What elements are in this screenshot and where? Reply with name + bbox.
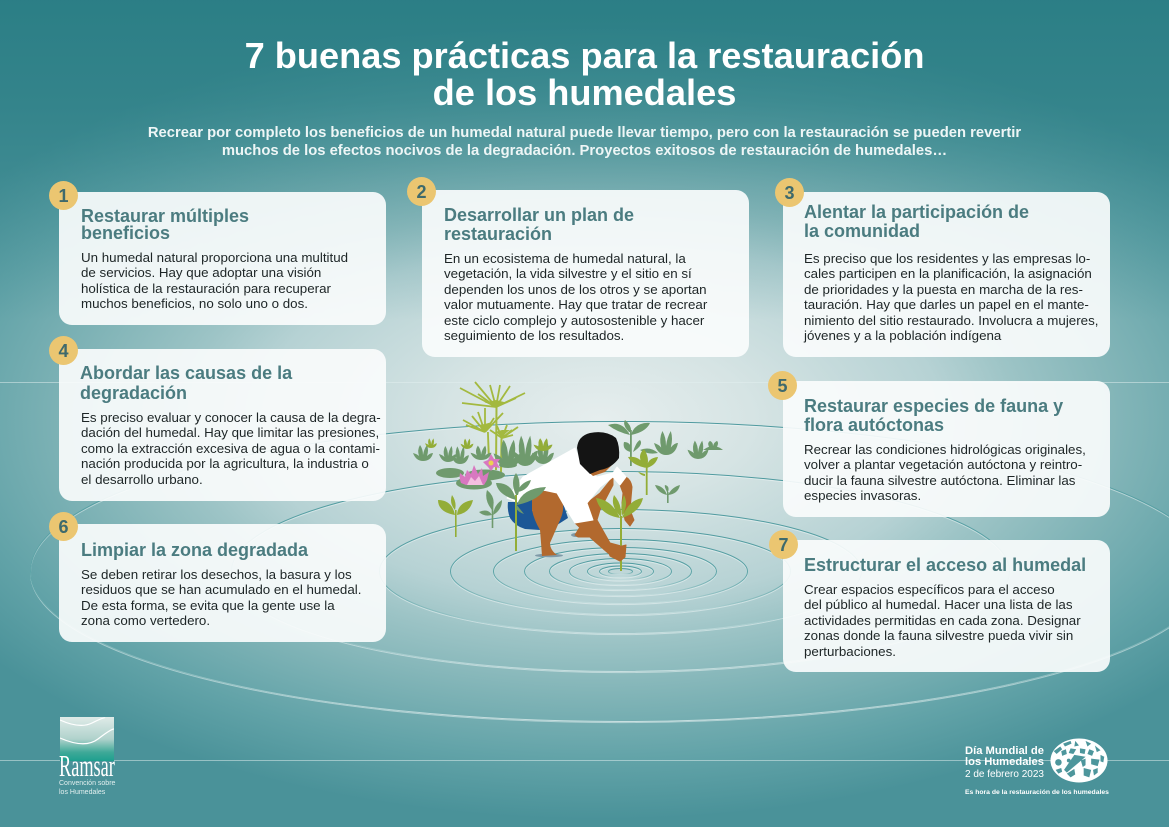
body text: del público al humedal. Hacer una lista de las xyxy=(804,597,1073,612)
heading xyxy=(444,205,634,244)
heading xyxy=(81,206,249,243)
icon: right yellow seedling xyxy=(628,449,658,495)
panel: card 2 xyxy=(422,190,749,357)
body text: Crear espacios específicos para el acceso xyxy=(804,582,1055,597)
body text: Es preciso evaluar y conocer la causa de la degra- xyxy=(81,410,381,425)
person: foot shadows xyxy=(535,533,581,557)
heading: flora autóctonas xyxy=(804,414,944,434)
badge 1: 1 xyxy=(58,186,68,206)
icon: water lilies xyxy=(460,454,500,485)
person: left arm xyxy=(575,477,625,561)
logo text xyxy=(965,745,1044,768)
body text xyxy=(804,442,1086,503)
body text: Un humedal natural proporciona una multitud xyxy=(81,250,348,265)
illustration: person planting in wetland xyxy=(413,381,723,571)
body text: dependen los unos de los otros y se aportan xyxy=(444,282,707,297)
badge 6: 6 xyxy=(58,517,68,537)
body text: vegetación, la vida silvestre y el sitio en sí xyxy=(444,266,692,281)
heading: Desarrollar un plan de xyxy=(444,205,634,225)
person: shorts xyxy=(508,497,568,530)
body text: dación del humedal. Hay que limitar las presiones, xyxy=(81,425,379,440)
heading: Restaurar múltiples xyxy=(81,206,249,226)
body text: cales participen en la planificación, la asignación xyxy=(804,266,1092,281)
icon: Ramsar waves xyxy=(60,717,114,761)
badge 5 xyxy=(768,371,797,400)
body text: residuos que se han acumulado en el humedal. xyxy=(81,582,361,597)
heading: la comunidad xyxy=(804,221,920,241)
heading xyxy=(804,396,1063,434)
slogan: Es hora de la restauración de los humedales xyxy=(965,789,1109,796)
body text: ducir la fauna silvestre autóctona. Eliminar las xyxy=(804,473,1075,488)
badge 2: 2 xyxy=(416,182,426,202)
body text: de prioridades y la puesta en marcha de la res- xyxy=(804,282,1083,297)
badge 1 xyxy=(49,181,78,210)
heading: Abordar las causas de la xyxy=(80,363,292,383)
body text: el desarrollo urbano. xyxy=(81,472,203,487)
icon: wetland emblem xyxy=(1050,738,1108,782)
title: 7 buenas prácticas para la restauración xyxy=(245,35,924,76)
logo caption xyxy=(59,780,116,796)
panel: card 7 xyxy=(783,540,1110,672)
logo wordmark: Ramsar xyxy=(59,748,115,783)
body text xyxy=(81,567,361,628)
person: right arm xyxy=(620,477,634,526)
body text xyxy=(81,410,381,487)
body text: especies invasoras. xyxy=(804,488,921,503)
heading xyxy=(80,363,292,403)
panel: card 5 xyxy=(783,381,1110,517)
body text xyxy=(804,582,1081,659)
panel: card 3 xyxy=(783,192,1110,357)
panel: card 4 xyxy=(59,349,386,501)
intro text: muchos de los efectos nocivos de la degradación. Proyectos exitosos de restauración de humedales… xyxy=(222,143,947,159)
body text xyxy=(81,250,348,311)
icon: left green seedling xyxy=(479,490,502,528)
logo text: los Humedales xyxy=(965,756,1044,768)
badge 4 xyxy=(49,336,78,365)
body text: seguimiento de los resultados. xyxy=(444,328,624,343)
icon: small right green seedling xyxy=(655,485,680,503)
panel: card 1 xyxy=(59,192,386,325)
badge 3: 3 xyxy=(784,183,794,203)
body text: actividades permitidas en cada zona. Designar xyxy=(804,613,1081,628)
body text: holística de la restauración para recuperar xyxy=(81,281,331,296)
body text xyxy=(444,251,708,343)
icon: yellow-green background plants xyxy=(425,438,552,451)
body text: nación producida por la agricultura, la industria o xyxy=(81,456,369,471)
person: shirt xyxy=(507,448,626,523)
body text: nimiento del sitio restaurado. Involucra a mujeres, xyxy=(804,313,1098,328)
title: de los humedales xyxy=(433,72,736,113)
icon: papyrus plants xyxy=(460,382,525,472)
body text: valor mutuamente. Hay que tratar de recrear xyxy=(444,297,707,312)
heading: Estructurar el acceso al humedal xyxy=(804,555,1086,575)
body text: zona como vertedero. xyxy=(81,613,210,628)
heading: Limpiar la zona degradada xyxy=(81,540,308,560)
logo text: Día Mundial de xyxy=(965,745,1044,757)
body text: De esta forma, se evita que la gente use la xyxy=(81,598,335,613)
body text xyxy=(804,251,1098,343)
body text: jóvenes y a la población indígena xyxy=(804,328,1001,343)
body text: Recrear las condiciones hidrológicas originales, xyxy=(804,442,1086,457)
heading: restauración xyxy=(444,224,552,244)
badge 7: 7 xyxy=(778,535,788,555)
icon: green marsh bushes xyxy=(413,431,723,490)
intro text xyxy=(148,125,1021,159)
badge 2 xyxy=(407,177,436,206)
person: rear foot xyxy=(575,527,598,537)
title xyxy=(245,35,924,113)
icon: left yellow seedling xyxy=(438,495,473,537)
heading xyxy=(804,202,1029,241)
heading: beneficios xyxy=(81,223,170,243)
heading: degradación xyxy=(80,383,187,403)
body text: zonas donde la fauna silvestre pueda vivir sin xyxy=(804,628,1073,643)
logo: Ramsar xyxy=(59,717,116,796)
body text: tauración. Hay que darles un papel en el mante- xyxy=(804,297,1089,312)
icon: front tall seedling xyxy=(496,473,546,551)
badge 5: 5 xyxy=(777,376,788,396)
badge 3 xyxy=(775,178,804,207)
body text: volver a plantar vegetación autóctona y reintro- xyxy=(804,457,1082,472)
body text: En un ecosistema de humedal natural, la xyxy=(444,251,686,266)
badge 6 xyxy=(49,512,78,541)
body text: perturbaciones. xyxy=(804,644,896,659)
logo caption: Convención sobre xyxy=(59,780,115,787)
body text: este ciclo complejo y autosostenible y hacer xyxy=(444,313,704,328)
logo: World Wetlands Day xyxy=(965,738,1109,796)
body text: Es preciso que los residentes y las empresas lo- xyxy=(804,251,1090,266)
icon: background right green tree xyxy=(608,420,658,466)
logo caption: los Humedales xyxy=(59,788,105,796)
intro text: Recrear por completo los beneficios de un humedal natural puede llevar tiempo, pero con la restauración se pueden revertir xyxy=(148,125,1021,141)
heading: Restaurar especies de fauna y xyxy=(804,396,1063,416)
body text: como la extracción excesiva de agua o la contami- xyxy=(81,441,380,456)
panel: card 6 xyxy=(59,524,386,642)
badge 4: 4 xyxy=(58,341,68,361)
badge 7 xyxy=(769,530,798,559)
person: hand xyxy=(607,545,626,561)
heading: Alentar la participación de xyxy=(804,202,1029,222)
body text: Se deben retirar los desechos, la basura y los xyxy=(81,567,352,582)
person: head xyxy=(577,432,619,476)
person: leg xyxy=(532,491,563,556)
body text: muchos beneficios, no solo uno o dos. xyxy=(81,296,308,311)
body text: de servicios. Hay que adoptar una visión xyxy=(81,265,321,280)
icon: seedling being planted xyxy=(596,495,643,571)
date: 2 de febrero 2023 xyxy=(965,769,1044,780)
